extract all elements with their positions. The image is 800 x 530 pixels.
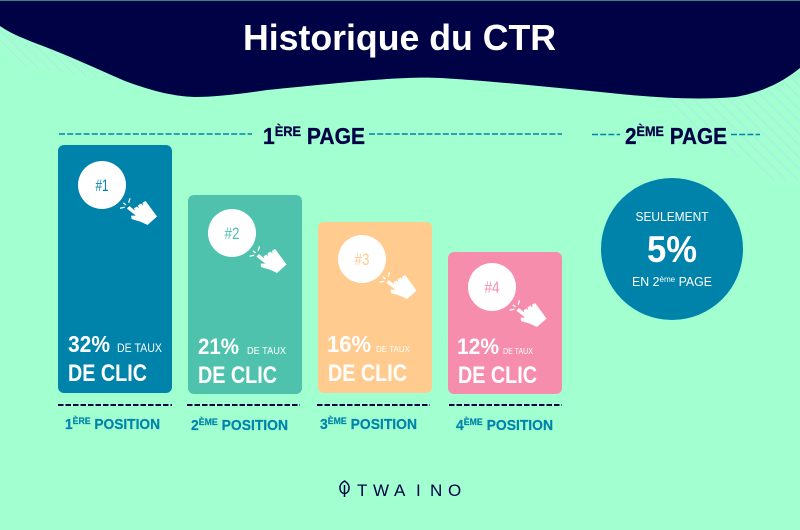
section heading: 1ère page: ÈRE: [275, 123, 301, 139]
rank badge 4: [468, 263, 516, 311]
position label 2: POSITION: [218, 417, 288, 434]
position label 1: 1: [65, 416, 73, 433]
stat: 32% de taux de clic: [68, 331, 162, 387]
position label 2: ÈME: [199, 417, 218, 428]
position label 4: POSITION: [483, 417, 553, 434]
stat: 12% de taux de clic: DE TAUX: [503, 346, 533, 356]
stat: 21% de taux de clic: 21%: [198, 334, 239, 359]
callout: 5% on page 2: SEULEMENT: [636, 209, 709, 224]
stat: 12% de taux de clic: 12%: [457, 334, 499, 359]
rank badge 1: #1: [96, 176, 108, 195]
position label 3: POSITION: [347, 416, 417, 433]
position label 3: 3: [320, 416, 328, 433]
section heading: 2ème page: PAGE: [664, 123, 727, 149]
rank badge 3: [338, 235, 386, 283]
stat: 12% de taux de clic: [457, 334, 537, 389]
stat: 12% de taux de clic: DE CLIC: [458, 362, 537, 389]
stat: 21% de taux de clic: DE CLIC: [198, 362, 277, 389]
icon: clicking hand: [250, 246, 286, 272]
section heading: 2ème page: [592, 123, 760, 149]
icon: clicking hand: [380, 272, 416, 298]
rank badge 2: #2: [224, 224, 240, 243]
callout: 5% on page 2: 5%: [647, 229, 697, 270]
rank badge 3: #3: [354, 250, 370, 269]
section heading: 1ère page: 1: [263, 123, 276, 149]
rank badge 2: [208, 209, 256, 257]
rank badge 1: [78, 161, 126, 209]
stat: 16% de taux de clic: [327, 331, 410, 387]
position label 3: ÈME: [328, 416, 347, 427]
position label 4: [449, 405, 562, 434]
position label 1: ÈRE: [73, 416, 91, 427]
section heading: 1ère page: PAGE: [301, 123, 365, 149]
position label 1: POSITION: [91, 416, 160, 433]
stat: 16% de taux de clic: DE CLIC: [328, 360, 407, 387]
position label 4: ÈME: [464, 417, 483, 428]
stat: 16% de taux de clic: 16%: [327, 331, 371, 357]
callout: 5% on page 2: PAGE: [675, 274, 712, 289]
section heading: 1ère page: [59, 123, 562, 149]
panel: position 1: [58, 145, 172, 393]
position label 2: 2: [191, 417, 199, 434]
callout: 5% on page 2: EN 2: [632, 274, 661, 289]
stat: 21% de taux de clic: DE TAUX: [247, 346, 286, 357]
callout: 5% on page 2: ème: [659, 274, 675, 284]
panel: position 3: [318, 222, 432, 393]
position label 2: [187, 405, 300, 434]
rank badge 4: #4: [484, 278, 500, 297]
position label 4: 4: [456, 417, 464, 434]
position label 1: [58, 405, 172, 433]
title: Historique du CTR: [243, 17, 556, 58]
icon: leaf: [340, 481, 349, 497]
icon: clicking hand: [510, 300, 546, 326]
header wave banner: [0, 0, 800, 98]
icon: clicking hand: [120, 198, 156, 224]
logo: Twaino: TWAINO: [357, 481, 461, 500]
stat: 16% de taux de clic: DE TAUX: [376, 344, 410, 354]
stat: 32% de taux de clic: DE TAUX: [117, 343, 162, 355]
panel: position 4: [448, 252, 562, 394]
section heading: 2ème page: 2: [625, 123, 638, 149]
panel: position 2: [188, 195, 302, 394]
section heading: 2ème page: ÈME: [637, 123, 664, 139]
stat: 32% de taux de clic: 32%: [68, 331, 110, 357]
stat: 21% de taux de clic: [198, 334, 286, 389]
callout: 5% on page 2: [601, 178, 743, 320]
position label 3: [317, 405, 430, 433]
stat: 32% de taux de clic: DE CLIC: [68, 360, 147, 387]
